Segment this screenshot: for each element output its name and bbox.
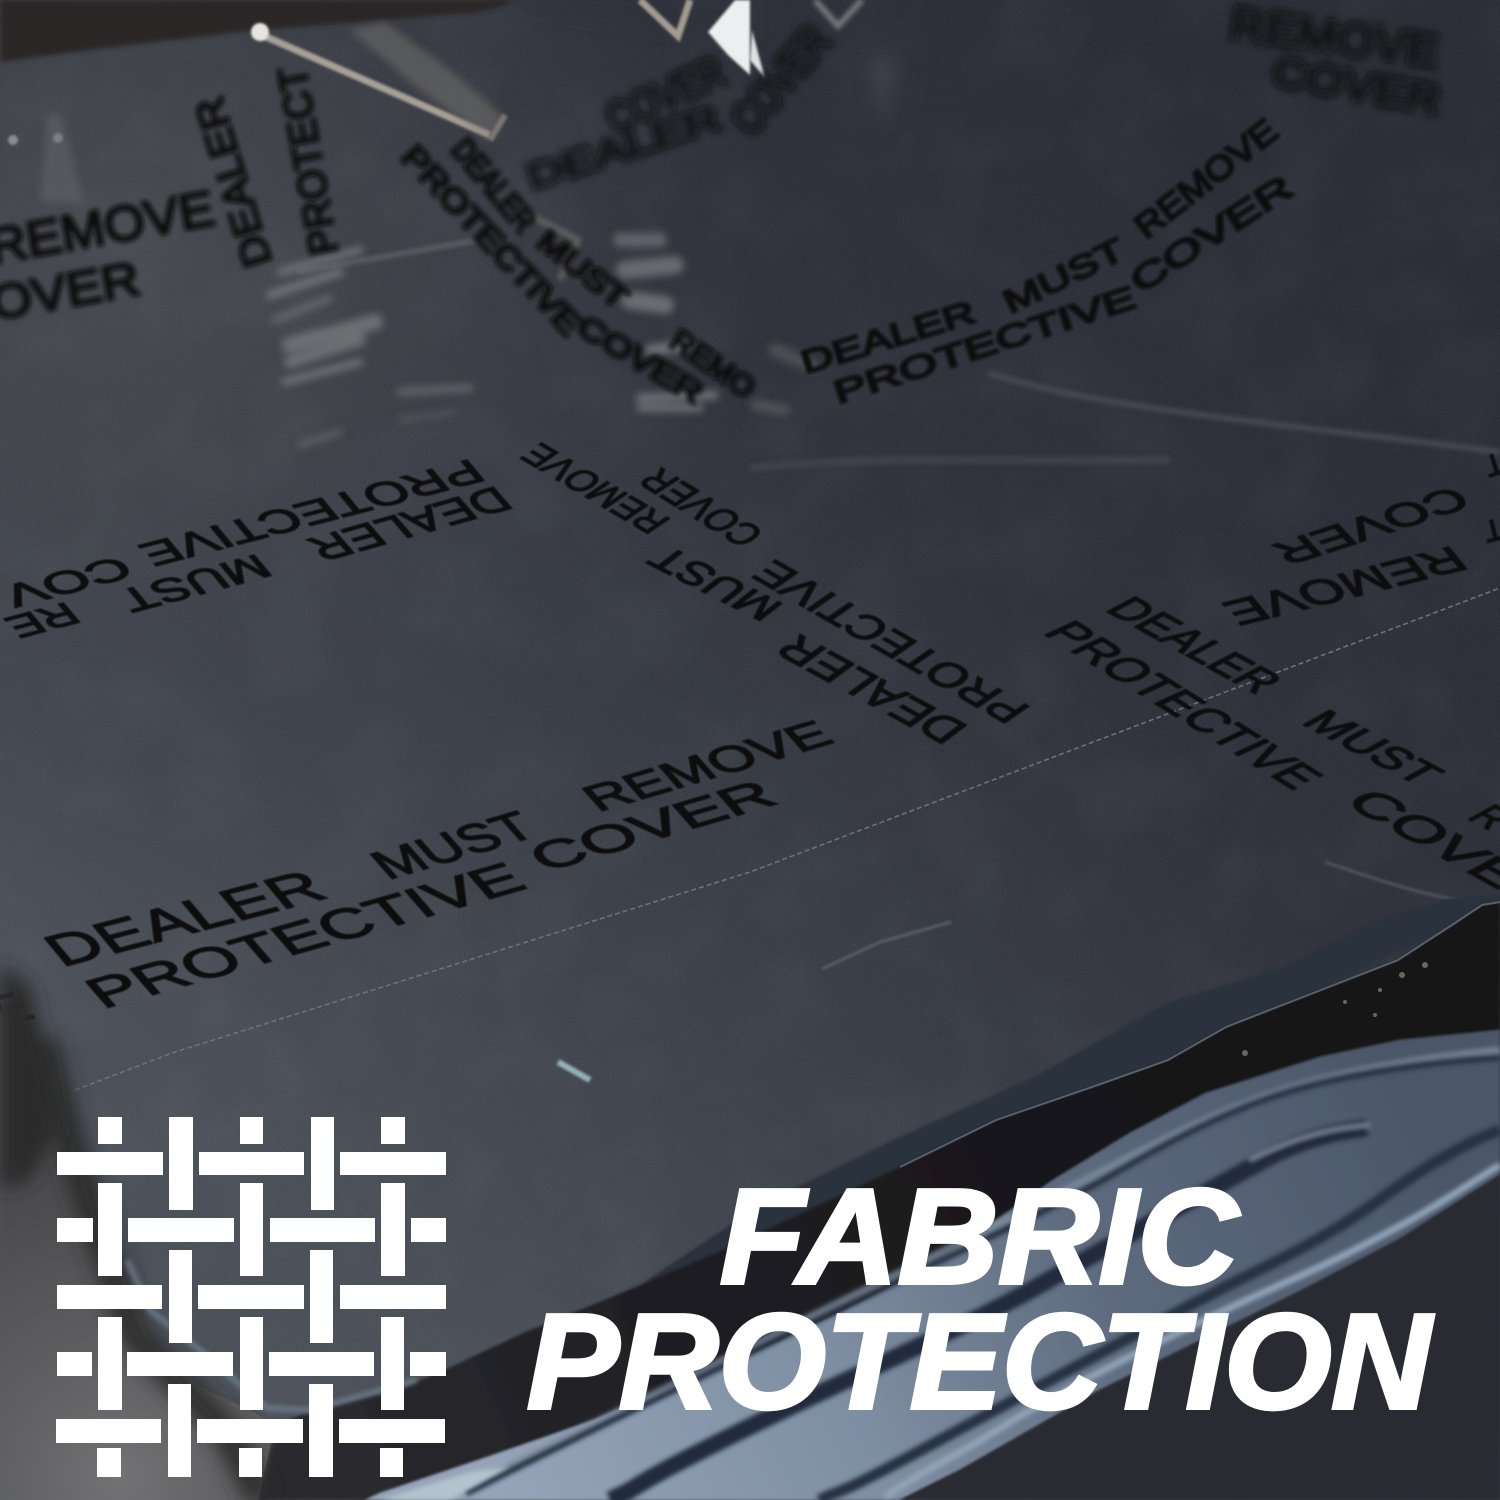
title: Fabric Protection xyxy=(527,1161,1434,1437)
printed text: heavily blurred top lines: COVER xyxy=(599,47,733,144)
printed text: lower left block: PROTECTIVE xyxy=(74,854,537,1018)
printed text: blurred upper right line: REMOVE xyxy=(1128,112,1285,246)
printed text: upside down left block: PROTECTIVE xyxy=(131,453,493,573)
printed text: upside down left block: DEALER xyxy=(298,479,520,567)
plastic film reflections xyxy=(8,0,895,445)
title: Fabric Protection: FABRIC xyxy=(720,1161,1241,1312)
icon: woven fabric xyxy=(56,1117,446,1477)
car floor mat xyxy=(365,1030,1500,1500)
black band under film edge xyxy=(258,902,1500,1500)
printed text: centre diagonal block: MUST xyxy=(639,539,792,627)
printed text: upside down left block: MUST xyxy=(110,548,280,619)
floor film fold strip xyxy=(640,895,1500,1285)
printed text: blurred top centre block xyxy=(395,131,761,410)
film wrinkles and seam xyxy=(75,373,1500,1090)
printed text: upper right upside down block xyxy=(1214,445,1500,632)
printed text: top left remnants: DEALER xyxy=(187,92,281,272)
printed text: centre diagonal block: PROTECTIVE xyxy=(742,554,1040,730)
printed text: blurred top centre block: PROTECTIVE xyxy=(395,138,588,342)
film edge highlight and dust specks xyxy=(900,902,1500,1167)
printed text: blurred upper right line xyxy=(797,112,1300,411)
printed text: centre diagonal block: REMOVE xyxy=(512,437,679,540)
printed text: right diagonal block: COVE xyxy=(1333,782,1500,895)
printed text: blurred upper right line: COVER xyxy=(1124,168,1300,301)
printed text: upper right upside down block: REMOVE xyxy=(1214,539,1475,632)
printed text: heavily blurred top lines xyxy=(522,0,1444,198)
printed text: right diagonal block: MUST xyxy=(1291,704,1454,791)
printed text: upper right upside down block: COVER xyxy=(1264,480,1479,572)
printed text: centre diagonal block: COVER xyxy=(630,462,774,552)
printed text: blurred top centre block: COVER xyxy=(571,310,708,410)
printed text: centre diagonal block xyxy=(512,437,1040,751)
title: Fabric Protection: PROTECTION xyxy=(527,1286,1434,1437)
printed text: centre diagonal block: DEALER xyxy=(766,627,978,751)
printed text: lower left block xyxy=(0,713,842,1033)
printed text: top left remnants xyxy=(0,63,347,331)
printed text: blurred top centre block: DEALER xyxy=(445,131,543,239)
printed text: right diagonal block xyxy=(1032,591,1500,895)
printed text: blurred upper right line: MUST xyxy=(997,231,1130,320)
printed text: heavily blurred top lines: COVER xyxy=(1268,48,1444,123)
dark band at top of photo xyxy=(0,0,520,62)
printed text: lower left block: DEALER xyxy=(33,862,337,976)
printed text: blurred top centre block: MUST xyxy=(531,225,634,315)
printed text: blurred upper right line: DEALER xyxy=(797,294,979,381)
printed text: upside down left block: RE xyxy=(0,596,87,643)
printed text: upside down left block xyxy=(0,453,520,643)
printed text: heavily blurred top lines: DEALER xyxy=(522,97,725,198)
printed text: right diagonal block: DEALER xyxy=(1094,591,1293,700)
printed text: upside down left block: COV xyxy=(0,550,140,613)
printed text: lower left block: REMOVE xyxy=(572,713,842,819)
printed text: top left remnants: PROTECT xyxy=(271,63,347,258)
lower left dark footwell xyxy=(0,965,420,1500)
printed text: right diagonal block: PROTECTIVE xyxy=(1032,614,1335,795)
printed text: lower left block: COVER xyxy=(519,773,787,880)
lower right dark carpet xyxy=(900,1175,1500,1500)
printed text: lower left block: MUST xyxy=(360,803,546,888)
printed text: blurred upper right line: PROTECTIVE xyxy=(829,279,1140,411)
printed text: blurred top centre block: REMO xyxy=(664,324,761,405)
